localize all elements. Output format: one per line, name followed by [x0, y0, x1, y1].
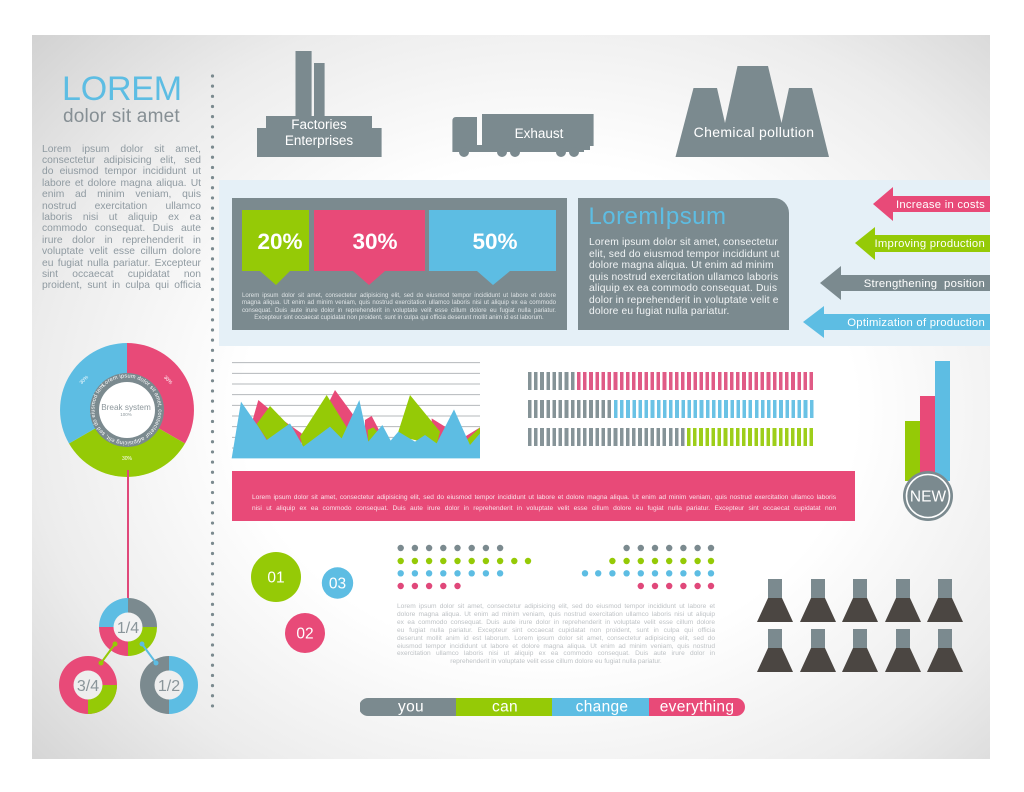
pink banner: Lorem ipsum dolor sit amet, consectetur adipisicing elit, sed do eiusmod tempor incididunt ut labore et dolore magna aliqua. Ut enim ad minim veniam, quis nostrud exercitation ullamco laboris [252, 494, 836, 500]
fraction donuts [59, 598, 198, 714]
body text: quis nostrud exercitation ullamco laboris [589, 272, 778, 282]
donut: 1/4: 1/4 [117, 620, 139, 637]
connector line [127, 470, 129, 608]
light blue band [219, 180, 990, 346]
body text: aliquip ex ea commodo consequat. Duis [589, 283, 777, 294]
donut chart: break system: 30% [162, 375, 174, 386]
slogan bar [360, 698, 745, 716]
pink banner [232, 471, 855, 521]
icon: cooling towers [676, 66, 829, 157]
flask grid [757, 579, 963, 672]
bottom text block: deserunt mollit anim id est laborum. Lorem ipsum dolor sit amet, consectetur adipisicing elit, sed do [397, 635, 715, 642]
donut chart: break system: 100% [120, 412, 132, 417]
callout: 20% [242, 210, 309, 285]
arrow: improving production: Improving production [874, 238, 985, 250]
slogan bar: change [576, 698, 628, 716]
connector: green [100, 642, 116, 664]
arrow: strengthening position: Strengthening position [864, 278, 985, 290]
text block [242, 292, 556, 321]
icon: factory: Factories [291, 117, 347, 132]
intro text: voluptate velit esse cillum dolore [42, 246, 201, 257]
donut: 3/4 [59, 656, 117, 714]
intro text: Lorem ipsum dolor sit amet, [42, 144, 201, 154]
body text: elit, sed do eiusmod tempor incididunt ut [589, 248, 779, 260]
slogan bar: everything [660, 698, 734, 716]
bottom text block: eiusmod tempor incididunt ut labore et dolore magna aliqua. Ut enim ad minim veniam, quis nostrud [397, 643, 715, 650]
bar row: blue [528, 400, 814, 418]
dotted divider [210, 74, 214, 708]
bottom text block: eu fugiat nulla pariatur. Excepteur sint occaecat cupidatat non proident, sunt in culpa qui officia [397, 627, 715, 634]
bottom text block: reprehenderit in voluptate velit esse cillum dolore eu fugiat nulla pariatur. [450, 658, 662, 665]
body text: dolor in reprehenderit in voluptate velit e [589, 294, 779, 306]
text block: magna aliqua. Ut enim ad minim veniam, quis nostrud exercitation ullamco laboris nisi ut aliquip ex ea commodo [242, 299, 556, 306]
intro text: irure dolor in reprehenderit in [42, 235, 201, 246]
intro text: nostrud exercitation ullamco [42, 201, 201, 212]
icon: cooling towers: Chemical pollution [694, 124, 814, 140]
callout: 30% [314, 210, 425, 285]
pink banner: nisi ut aliquip ex ea commodo consequat. Duis aute irure dolor in reprehenderit in voluptate velit esse cillum dolore eu fugiat nulla pariatur. Excepteur sint occaecat cupidatat non [252, 504, 836, 512]
text block: Excepteur sint occaecat cupidatat non proident, sunt in culpa qui officia deserunt mollit anim id est laborum. [254, 314, 544, 321]
donut: 1/2 [140, 656, 198, 714]
intro text: sint occaecat cupidatat non [42, 269, 201, 280]
stepped bars with NEW badge [903, 361, 953, 521]
donut: 1/2: 1/2 [158, 678, 180, 695]
heading: LoremIpsum [588, 202, 726, 230]
icon: factory: Enterprises [285, 133, 353, 148]
bottom text block: Lorem ipsum dolor sit amet, consectetur adipisicing elit, sed do eiusmod tempor incididunt ut labore et [397, 603, 715, 610]
bottom text block: ex ea commodo consequat. Duis aute irure dolor in reprehenderit in voluptate velit esse cillum dolore [397, 619, 715, 626]
arrow: increase in costs [873, 187, 990, 221]
intro text [42, 144, 201, 291]
text block: consequat. Duis aute irure dolor in reprehenderit in voluptate velit esse cillum dolore eu fugiat nulla pariatur. [242, 307, 556, 314]
bottom text block [397, 603, 715, 665]
body text: Lorem ipsum dolor sit amet, consectetur [589, 237, 778, 248]
title block [62, 70, 182, 126]
title: LOREM: LOREM [62, 70, 182, 108]
arrow: improving production [855, 227, 990, 260]
arrow: strengthening position [820, 266, 990, 300]
donut chart: break system [60, 343, 194, 477]
connector: blue [140, 642, 158, 664]
body text [589, 237, 780, 317]
callout: 50%: 50% [472, 229, 518, 254]
bar row: green [528, 428, 813, 446]
body text: dolore eu fugiat nulla pariatur. [589, 306, 729, 317]
bottom text block: exercitation ullamco laboris nisi ut aliquip ex ea commodo consequat. Duis aute irure dolor in [397, 650, 715, 657]
bar row: pink [528, 372, 813, 390]
circle 01: 01 [267, 570, 285, 586]
intro text: enim ad minim veniam, quis [42, 189, 201, 200]
area chart [232, 362, 480, 458]
donut chart: break system: 30% [79, 374, 90, 386]
bottom text block: dolore magna aliqua. Ut enim ad minim veniam, quis nostrud exercitation ullamco laboris nisi ut aliquip [397, 611, 715, 618]
callout: 20%: 20% [257, 229, 303, 254]
intro text: commodo consequat. Duis aute [42, 223, 201, 234]
arrow: increase in costs: Increase in costs [896, 199, 985, 211]
intro text: consectetur adipisicing elit, sed [42, 155, 201, 166]
icon: truck [452, 114, 594, 157]
icon: truck: Exhaust [515, 126, 564, 141]
intro text: proident, sunt in culpa qui officia [42, 280, 201, 291]
panel: percentages [232, 198, 567, 330]
donut chart: break system: Break system [101, 403, 151, 412]
body text: dolore magna aliqua. Ut enim ad minim [589, 260, 774, 271]
donut: 3/4: 3/4 [77, 678, 99, 695]
arrow: optimization of production: Optimization of production [847, 317, 985, 329]
donut: 1/4 [99, 598, 157, 656]
intro text: do eiusmod tempor incididunt ut [42, 166, 201, 177]
circle 03: 03 [329, 576, 346, 592]
panel: LoremIpsum [578, 198, 789, 330]
slogan bar: you [398, 698, 424, 716]
text block: Lorem ipsum dolor sit amet, consectetur adipisicing elit, sed do eiusmod tempor incididunt ut labore et dolore [242, 292, 556, 299]
dot matrix [398, 544, 714, 590]
numbered circles [251, 552, 354, 653]
callout: 50% [429, 210, 556, 285]
donut chart: break system: 30% [122, 456, 133, 462]
badge: NEW [903, 471, 953, 521]
circle 02: 02 [296, 626, 314, 642]
badge: NEW: NEW [910, 488, 946, 506]
arrow: optimization of production [803, 306, 990, 338]
intro text: eu fugiat nulla pariatur. Excepteur [42, 258, 201, 269]
slogan bar: can [492, 698, 518, 716]
subtitle: dolor sit amet [63, 106, 180, 126]
intro text: labore et dolore magna aliqua. Ut [42, 178, 201, 189]
intro text: laboris nisi ut aliquip ex ea [42, 212, 201, 223]
callout: 30%: 30% [352, 229, 398, 254]
icon: factory [257, 51, 382, 157]
